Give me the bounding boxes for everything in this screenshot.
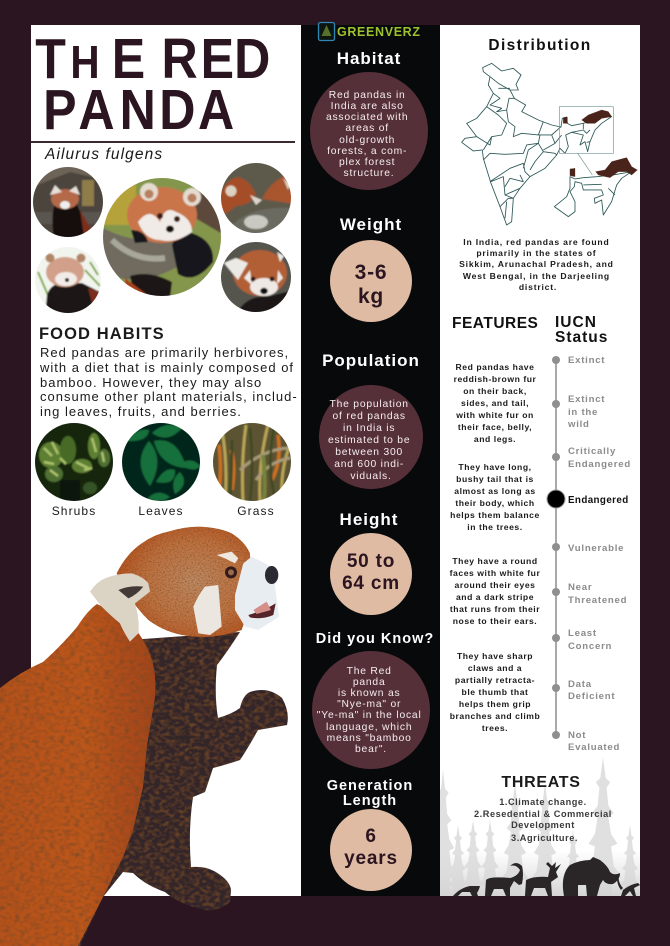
panel: right column xyxy=(440,25,640,896)
feature: claws: partially retracta- xyxy=(455,675,535,685)
panda: brow patch xyxy=(217,552,238,563)
panda: orange back xyxy=(0,604,155,946)
circle: height xyxy=(330,533,412,615)
map outline xyxy=(462,63,612,225)
panda: muzzle xyxy=(235,557,279,630)
title: P xyxy=(43,78,77,142)
photo: panda on log xyxy=(33,167,103,237)
feature: tail: their body, which xyxy=(455,498,535,508)
circle: height: 50 to xyxy=(347,551,395,572)
feature: tail: They have long, xyxy=(458,462,532,472)
IUCN status timeline: wild xyxy=(567,419,590,430)
panel: middle column xyxy=(301,25,440,896)
IUCN status timeline: Data xyxy=(568,679,592,690)
feature: claws: trees. xyxy=(482,723,508,733)
feature: face: They have a round xyxy=(452,556,538,566)
icon: leaves xyxy=(122,423,200,501)
text: threats: 2.Resedential & Commercial xyxy=(474,809,612,819)
circle: habitat: associated with xyxy=(326,112,408,123)
feature: fur: with white fur on xyxy=(455,410,534,420)
animal: big cat xyxy=(453,886,480,896)
map state borders xyxy=(477,77,590,218)
text: features xyxy=(450,362,540,733)
title: H xyxy=(70,38,100,89)
logo icon xyxy=(318,22,334,40)
animals silhouette xyxy=(453,857,640,896)
circle: population: viduals. xyxy=(350,471,392,482)
forest background xyxy=(429,757,640,897)
feature: tail: almost as long as xyxy=(454,486,536,496)
feature: fur: Red pandas have xyxy=(456,362,534,372)
circle: did you know xyxy=(312,651,430,769)
feature: claws: branches and climb xyxy=(450,711,540,721)
IUCN status timeline: Evaluated xyxy=(568,742,620,753)
text: food habits: with a diet that is mainly composed of xyxy=(39,360,294,375)
circle: population: estimated to be xyxy=(328,435,410,446)
feature: face: that runs from their xyxy=(450,604,540,614)
IUCN status timeline: Extinct xyxy=(568,394,605,405)
feature: fur: and legs. xyxy=(474,434,516,444)
IUCN status timeline: Least xyxy=(568,628,597,639)
text: food habits: Red pandas are primarily herbivores, xyxy=(40,345,289,360)
circle: did you know: panda xyxy=(353,677,385,688)
feature: fur: on their back, xyxy=(463,386,527,396)
heading: IUCN status: IUCN xyxy=(555,314,597,331)
feature: claws: claws and a xyxy=(468,663,522,673)
feature: claws: They have sharp xyxy=(457,651,533,661)
feature: claws: helps them grip xyxy=(459,699,531,709)
feature: tail: in the trees. xyxy=(467,522,523,532)
circle: generation length xyxy=(330,809,412,891)
food labels: Leaves xyxy=(138,504,184,518)
heading: weight: Weight xyxy=(340,215,402,234)
circle: generation length: years xyxy=(344,848,398,869)
map highlighted regions xyxy=(563,110,637,178)
illustration: red panda xyxy=(0,527,288,946)
text: distribution: In India, red pandas are found xyxy=(463,237,610,247)
feature: claws: ble thumb that xyxy=(462,687,528,697)
panda: mouth xyxy=(248,603,276,618)
panda: head xyxy=(90,527,279,642)
IUCN status timeline: Endangered xyxy=(568,459,631,470)
circle: did you know: means "bamboo xyxy=(327,733,412,744)
heading: food habits: FOOD HABITS xyxy=(39,325,165,343)
title: E xyxy=(112,27,145,91)
feature: tail: bushy tail that is xyxy=(456,474,534,484)
map inset detail xyxy=(554,172,632,217)
IUCN status timeline: in the xyxy=(568,407,598,418)
bottom band xyxy=(440,896,670,946)
circle: generation length: 6 xyxy=(365,826,377,847)
animal: elephant xyxy=(563,857,620,896)
title: T xyxy=(35,27,66,91)
title rule xyxy=(31,141,295,143)
circle: habitat: forests, a com- xyxy=(327,146,407,157)
panel: left column xyxy=(31,25,301,896)
circle: habitat: structure. xyxy=(344,168,394,179)
title: A xyxy=(78,78,115,142)
map: India xyxy=(462,63,637,225)
heading: generation length: Generation xyxy=(327,778,413,794)
food labels xyxy=(52,504,275,518)
text: food habits: bamboo. However, they may also xyxy=(40,375,262,390)
map callout line xyxy=(578,153,592,175)
circle: habitat: areas of xyxy=(345,123,389,134)
circle: weight: kg xyxy=(358,285,384,308)
panda: cheek patch xyxy=(193,585,222,635)
feature: fur: their face, belly, xyxy=(458,422,532,432)
circle: habitat xyxy=(310,72,428,190)
IUCN status timeline xyxy=(547,355,631,753)
circle: population: of red pandas xyxy=(332,411,406,422)
IUCN status timeline: Threatened xyxy=(568,595,627,606)
text: distribution: district. xyxy=(519,282,557,292)
photo: panda on branch xyxy=(100,175,224,299)
circle: population: between 300 xyxy=(335,447,403,458)
logo xyxy=(318,22,420,40)
text: threats: 1.Climate change. xyxy=(499,797,587,807)
icon: shrubs xyxy=(35,423,113,501)
circle: did you know: is known as xyxy=(338,688,400,699)
panda: dark body xyxy=(60,632,288,946)
text: threats: Development xyxy=(511,820,575,830)
food labels: Shrubs xyxy=(52,504,96,518)
panda: eye xyxy=(225,566,237,578)
title: D xyxy=(159,78,195,142)
feature: fur: reddish-brown fur xyxy=(454,374,537,384)
photo: panda in bamboo xyxy=(35,247,101,313)
text: distribution: Sikkim, Arunachal Pradesh, and xyxy=(459,259,614,269)
title: N xyxy=(120,78,156,142)
heading: threats: THREATS xyxy=(501,774,581,791)
IUCN status timeline: Endangered xyxy=(568,495,629,506)
feature: face: and a dark stripe xyxy=(456,592,534,602)
circle: population: in India is xyxy=(343,423,395,434)
circle: did you know: bear". xyxy=(355,744,387,755)
heading: generation length: Length xyxy=(343,793,397,809)
IUCN status timeline: Vulnerable xyxy=(568,543,624,554)
feature: tail: helps them balance xyxy=(450,510,540,520)
text: threats: 3.Agriculture. xyxy=(511,833,578,843)
feature: fur: sides, and tail, xyxy=(461,398,529,408)
text: distribution: West Bengal, in the Darjeeling xyxy=(463,271,610,281)
heading: IUCN status: Status xyxy=(555,329,608,346)
text: food habits: ing leaves, fruits, and berries. xyxy=(40,404,242,419)
heading: habitat: Habitat xyxy=(337,49,401,68)
panda: ear xyxy=(90,573,150,642)
photo: panda face close-up xyxy=(221,242,291,312)
text: food habits: consume other plant materials, includ- xyxy=(40,389,298,404)
circle: habitat: India are also xyxy=(331,101,404,112)
circle: habitat: plex forest xyxy=(339,157,395,168)
feature: face: nose to their ears. xyxy=(453,616,537,626)
food labels: Grass xyxy=(237,504,275,518)
circle: population: and 600 indi- xyxy=(334,459,404,470)
photo: two pandas touching noses xyxy=(221,163,291,233)
feature: face: faces with white fur xyxy=(450,568,540,578)
current status marker xyxy=(547,490,565,508)
animal: deer xyxy=(525,862,561,896)
animal: monkey xyxy=(617,878,640,896)
IUCN status timeline: Extinct xyxy=(568,355,605,366)
map inset box xyxy=(559,107,613,153)
title: R xyxy=(161,27,198,91)
circle: did you know: The Red xyxy=(347,666,392,677)
heading: distribution: Distribution xyxy=(488,37,592,54)
circle: weight xyxy=(330,240,412,322)
heading: population: Population xyxy=(322,351,420,370)
IUCN status timeline: Near xyxy=(568,582,592,593)
IUCN status timeline: Concern xyxy=(568,641,612,652)
circle: did you know: "Nye-ma" or xyxy=(337,699,401,710)
circle: weight: 3-6 xyxy=(355,261,387,284)
text: distribution: primarily in the states of xyxy=(476,248,596,258)
title: E xyxy=(201,27,234,91)
heading: did you know: Did you Know? xyxy=(316,631,434,647)
animal: ibex xyxy=(485,863,523,896)
heading: height: Height xyxy=(340,510,398,529)
circle: population xyxy=(319,385,423,489)
IUCN status timeline: Not xyxy=(568,730,586,741)
icon: grass xyxy=(213,423,291,501)
title xyxy=(35,27,270,142)
title: A xyxy=(198,78,234,142)
feature: face: around their eyes xyxy=(454,580,536,590)
IUCN status timeline: Critically xyxy=(568,446,616,457)
IUCN status timeline: Deficient xyxy=(568,691,615,702)
logo wordmark: GREENVERZ xyxy=(337,25,420,39)
circle: habitat: old-growth xyxy=(339,135,395,146)
circle: did you know: language, which xyxy=(326,722,412,733)
heading: features: FEATURES xyxy=(452,315,538,332)
circle: did you know: "Ye-ma" in the local xyxy=(317,710,422,721)
circle: population: The population xyxy=(330,399,409,410)
circle: height: 64 cm xyxy=(342,573,400,594)
circle: habitat: Red pandas in xyxy=(329,90,406,101)
scientific name: Ailurus fulgens xyxy=(44,146,163,163)
panda: nose xyxy=(265,566,278,584)
title: D xyxy=(234,27,270,91)
